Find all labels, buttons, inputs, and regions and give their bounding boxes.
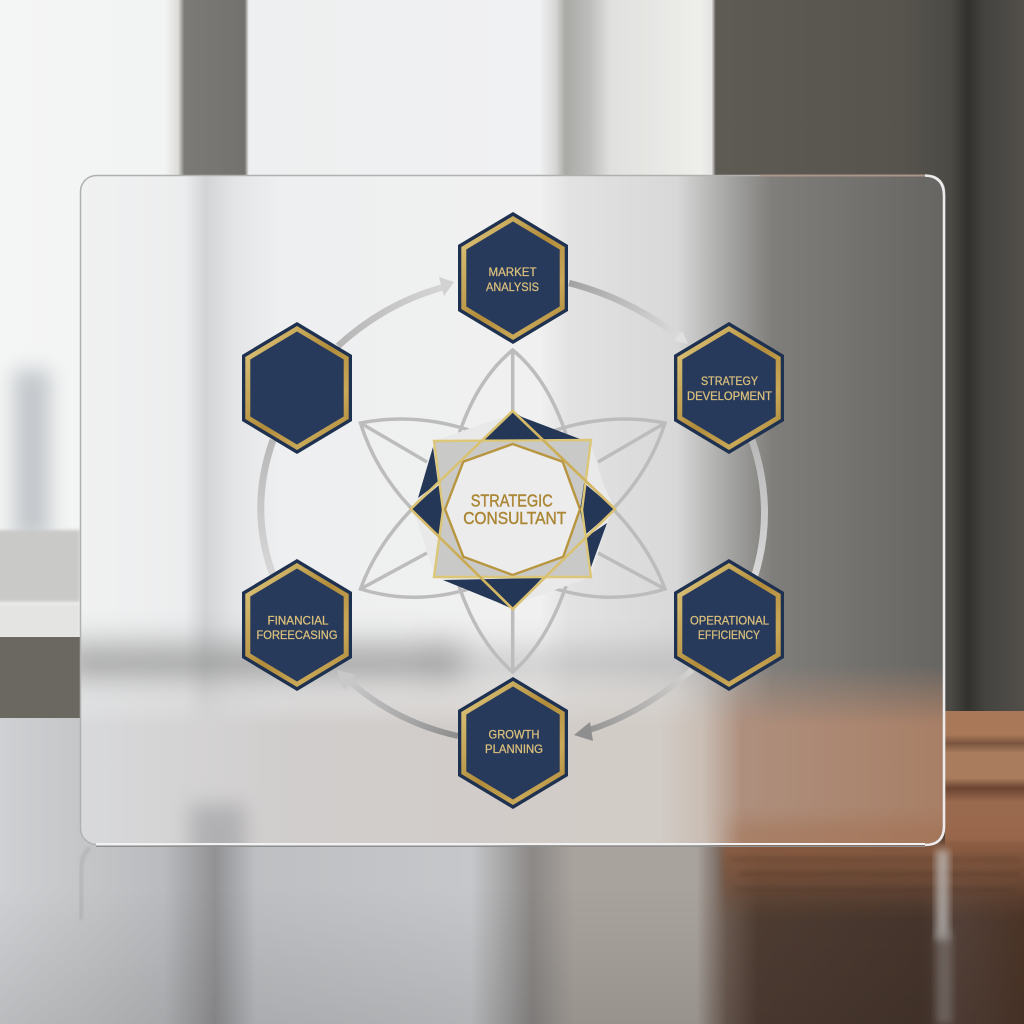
arrow: to strategy development [569, 283, 688, 344]
navy wedges [411, 411, 615, 609]
petal: lower left [360, 510, 472, 597]
hexagon: growth planning: GROWTH [488, 728, 540, 742]
hexagon: strategy development: DEVELOPMENT [687, 389, 773, 403]
petal: top [459, 350, 566, 434]
center label: STRATEGIC [471, 490, 553, 510]
center label [463, 490, 566, 528]
hexagon: financial forecasing: FOREECASING [256, 628, 338, 642]
gray inner square [434, 441, 591, 577]
arrow: to market analysis [338, 277, 454, 346]
hexagon: growth planning [458, 677, 568, 809]
arrow: to growth planning [574, 670, 692, 741]
hexagon: operational efficiency: EFFICIENCY [698, 628, 760, 642]
flow ring with arrows [261, 277, 765, 741]
petal: bottom [459, 586, 566, 672]
hexagon: financial forecasing [242, 559, 352, 691]
hexagon: financial forecasing: FINANCIAL [268, 614, 329, 628]
hexagon: market analysis: MARKET [488, 265, 537, 279]
panel: frosted glass sheet [60, 175, 970, 865]
gold diamond outline [411, 411, 615, 609]
arc: left side [261, 440, 274, 578]
hexagon: strategy development: STRATEGY [701, 374, 758, 388]
petal: lower right [553, 510, 665, 597]
hexagon: operational efficiency [674, 559, 784, 691]
hexagon: operational efficiency: OPERATIONAL [690, 614, 769, 628]
central star emblem [411, 411, 615, 609]
hexagon: market analysis [458, 212, 568, 344]
arc: right side [752, 440, 765, 578]
center label: CONSULTANT [463, 508, 566, 528]
hexagon: market analysis: ANALYSIS [486, 280, 539, 294]
hexagon: strategy development [674, 322, 784, 454]
hexagon: growth planning: PLANNING [485, 742, 543, 756]
hexagon: empty [242, 322, 352, 454]
arrow: to financial forecasing [337, 670, 458, 736]
rotated light polygon [411, 418, 614, 602]
star petals [360, 350, 665, 672]
white octagon [445, 444, 580, 575]
petal: upper left [360, 419, 472, 508]
petal: upper right [553, 419, 665, 508]
gold concave square outline [434, 440, 591, 577]
